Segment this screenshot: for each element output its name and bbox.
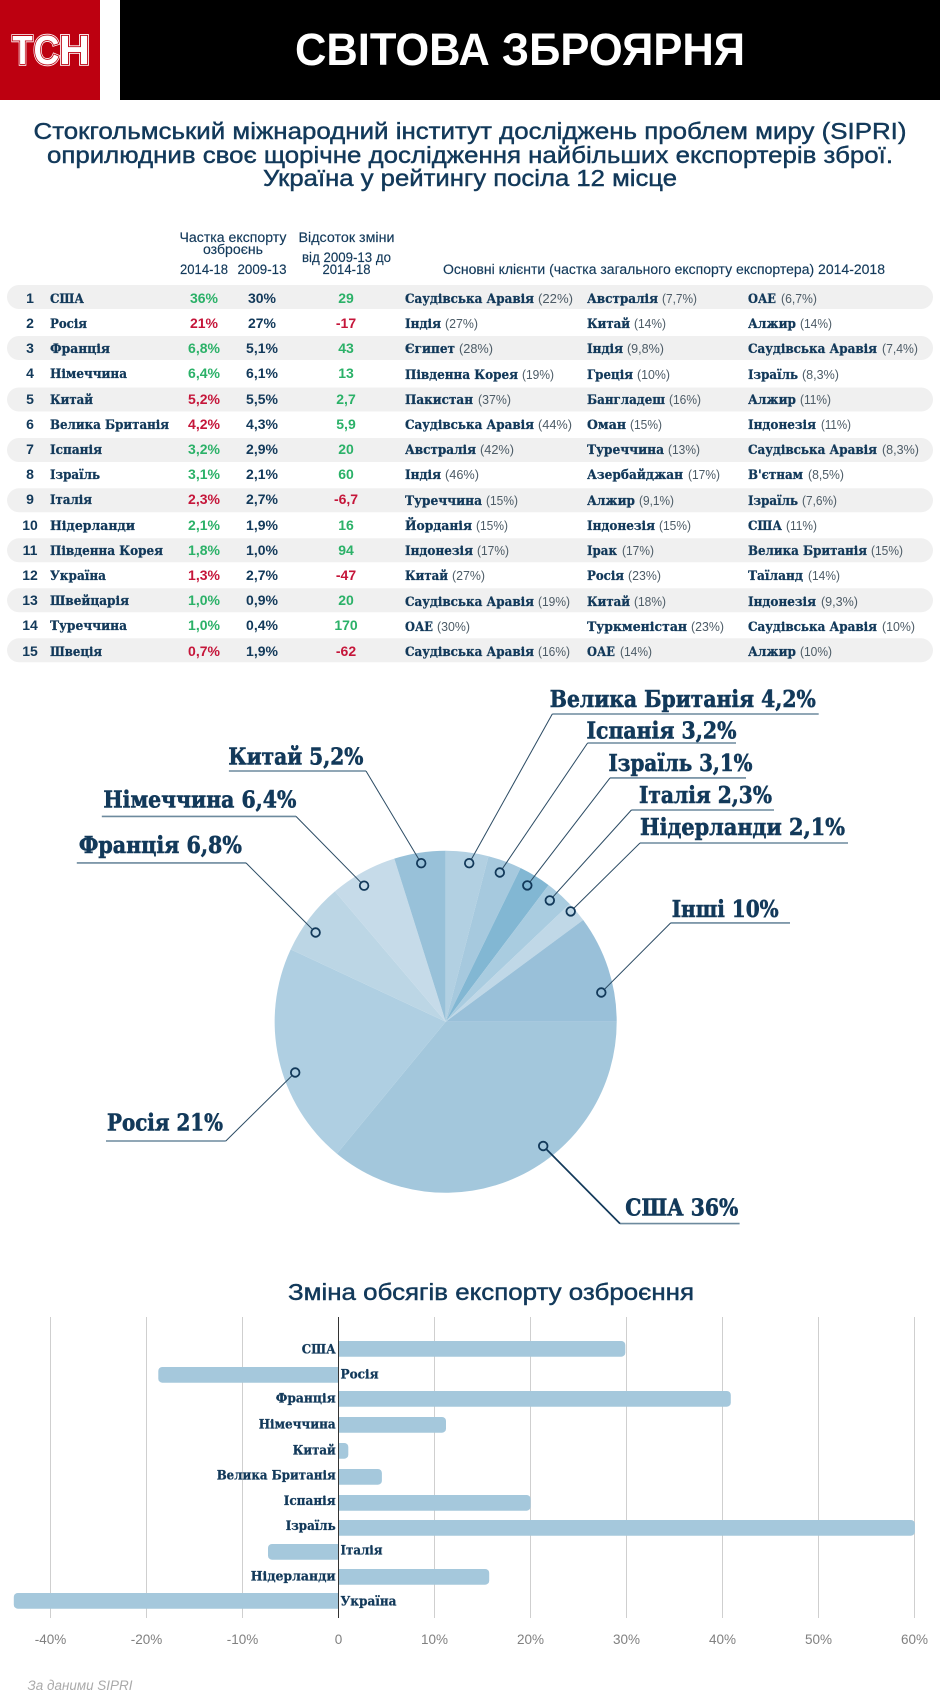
table row: Італія: 2,7% (246, 491, 279, 507)
pie chart (275, 851, 617, 1193)
table row: Швейцарія: Швейцарія (50, 594, 129, 609)
table row: Франція: 43 (338, 340, 354, 356)
table row: Туреччина: (30%) (437, 619, 470, 634)
table row: Ізраїль: 60 (338, 466, 354, 482)
table row: Китай: Бангладеш (587, 393, 665, 408)
table row: Нідерланди: (15%) (476, 518, 508, 533)
bar chart: Німеччина (259, 1418, 336, 1433)
table row: Україна (22, 567, 840, 584)
logo: TSN: С (34, 27, 60, 73)
table row: Німеччина: 6,4% (188, 365, 221, 381)
pie label: Франція: Франція 6,8% (79, 832, 242, 859)
table row: Південна Корея: Велика Британія (748, 544, 867, 559)
bar chart: Велика Британія (217, 1469, 336, 1484)
table row: Китай (7, 388, 933, 412)
pie label: Росія: Росія 21% (107, 1110, 223, 1137)
table row: Велика Британія: Велика Британія (50, 418, 169, 433)
table row: Франція: (28%) (459, 341, 493, 356)
logo: TSN: Т (12, 27, 33, 73)
table row: Нідерланди: Індонезія (587, 519, 655, 534)
table row: Швеція: (10%) (800, 644, 832, 659)
table row: Велика Британія: Саудівська Аравія (405, 418, 534, 433)
table row: Нідерланди: 1,9% (246, 517, 279, 533)
table row: США: 29 (338, 290, 354, 306)
pie label: Китай: Китай 5,2% (228, 744, 364, 771)
table row: Південна Корея: (15%) (871, 543, 903, 558)
intro text: Стокгольмський міжнародний інститут досліджень проблем миру (SIPRI) (34, 118, 906, 144)
bar chart heading: Зміна обсягів експорту озброєння (288, 1279, 694, 1305)
table row: Франція: Єгипет (405, 342, 455, 357)
table row: Ізраїль (26, 466, 844, 483)
pie label: США: США 36% (625, 1194, 738, 1222)
table row: Ізраїль: В'єтнам (748, 468, 803, 483)
table row: США: США (50, 292, 84, 307)
bar chart: Італія (340, 1544, 383, 1559)
table row: Швейцарія: (18%) (634, 594, 666, 609)
table row: Південна Корея: Індонезія (405, 544, 473, 559)
table row: Південна Корея: Південна Корея (50, 544, 163, 559)
table row: Іспанія (7, 438, 933, 462)
table row: Швеція: (14%) (620, 644, 652, 659)
bar chart: Іспанія (284, 1494, 336, 1509)
table header (180, 230, 885, 277)
table row: Китай: 5,5% (246, 391, 279, 407)
table row: Велика Британія: 6 (26, 416, 34, 432)
table row: Італія: (9,1%) (639, 493, 674, 508)
pie label: Китай (228, 744, 426, 868)
bar chart: -20% (131, 1632, 162, 1647)
source note: За даними SIPRI (28, 1678, 133, 1693)
table row: Південна Корея: (17%) (622, 543, 654, 558)
logo: TSN: Н (59, 27, 90, 73)
table row: Нідерланди: Нідерланди (50, 519, 135, 534)
pie label: Інші: Інші 10% (672, 896, 779, 923)
table row: Китай: 5 (26, 391, 34, 407)
table row: Франція: 3 (26, 340, 34, 356)
logo: TSN: Т (12, 27, 33, 73)
table row: Франція: Індія (587, 342, 623, 357)
table header: від 2009-13 до (302, 250, 391, 265)
table row: Україна: Китай (405, 569, 448, 584)
table row: Південна Корея (7, 538, 933, 562)
table row: Іспанія: Туреччина (587, 443, 665, 458)
bar chart: 60% (901, 1632, 928, 1647)
table row: Туреччина: 14 (22, 617, 38, 633)
pie label: Інші (597, 896, 790, 997)
table row: Німеччина (26, 365, 839, 383)
table row: Швейцарія: (9,3%) (821, 594, 858, 609)
table row: Росія: 21% (190, 315, 219, 331)
table row: Іспанія: 20 (338, 441, 354, 457)
pie label: Нідерланди: Нідерланди 2,1% (640, 814, 845, 841)
table row: США: 36% (190, 290, 219, 306)
table row: Швейцарія: (19%) (538, 594, 570, 609)
table row: Швейцарія: 13 (22, 592, 38, 608)
table row: Швеція: Швеція (50, 645, 102, 660)
bar chart: 10% (421, 1632, 448, 1647)
table row: Франція: Франція (50, 342, 110, 357)
table row: Китай: (37%) (478, 392, 511, 407)
table row: США: 1 (26, 290, 34, 306)
table row: Італія: 9 (26, 491, 34, 507)
table row: Італія: -6,7 (334, 491, 358, 507)
table row: Росія: Росія (50, 317, 87, 332)
table row: Китай: (11%) (800, 392, 831, 407)
pie label: Італія: Італія 2,3% (639, 782, 772, 809)
table row: Росія: Алжир (748, 317, 796, 332)
table row: Німеччина: (8,3%) (802, 367, 839, 382)
table row: Китай: 2,7 (336, 391, 356, 407)
table row: Росія: 2 (26, 315, 34, 331)
table row: Італія: Алжир (587, 494, 635, 509)
table row: Ізраїль: (17%) (688, 467, 720, 482)
table row: Нідерланди: Йорданія (405, 517, 472, 534)
bar chart: Китай (293, 1444, 336, 1459)
table header: 2009-13 (238, 262, 286, 277)
table row: Німеччина: 13 (338, 365, 354, 381)
pie label: Велика Британія: Велика Британія 4,2% (550, 686, 816, 713)
table row: Іспанія: (42%) (480, 442, 514, 457)
table row: Велика Британія: 4,2% (188, 416, 221, 432)
table row: Швеція: 15 (22, 643, 38, 659)
bar chart: 30% (613, 1632, 640, 1647)
table row: Німеччина: 6,1% (246, 365, 279, 381)
pie label: Іспанія: Іспанія 3,2% (586, 718, 737, 744)
table row: Швейцарія: 20 (338, 592, 354, 608)
table row: Іспанія: 2,9% (246, 441, 279, 457)
table row: Китай: Пакистан (405, 393, 473, 408)
table row: Росія: (14%) (634, 316, 666, 331)
table row: Туреччина: Туреччина (50, 619, 128, 634)
intro text: Україна у рейтингу посіла 12 місце (263, 165, 677, 191)
bar chart (14, 1317, 928, 1647)
table row: Китай: Китай (50, 393, 93, 408)
table row: Росія: (27%) (445, 316, 478, 331)
pie label: Нідерланди (566, 814, 848, 916)
table row: Франція: (7,4%) (882, 341, 918, 356)
table row: Південна Корея: 1,0% (246, 542, 279, 558)
table row: Ізраїль: (8,5%) (808, 467, 844, 482)
table row: Франція: 5,1% (246, 340, 279, 356)
table row: Велика Британія: (15%) (630, 417, 662, 432)
table row: Італія: Італія (50, 493, 92, 508)
bar chart: 20% (517, 1632, 544, 1647)
bar chart: 40% (709, 1632, 736, 1647)
table row: Швейцарія: Індонезія (748, 595, 816, 610)
pie label: Німеччина (102, 786, 368, 890)
bar chart: 50% (805, 1632, 832, 1647)
pie label: Італія (546, 782, 774, 905)
logo: TSN: Т (12, 27, 33, 73)
table row: Велика Британія: 5,9 (336, 416, 356, 432)
logo: TSN: Н (59, 27, 90, 73)
table row: Німеччина: Ізраїль (748, 368, 798, 383)
table row: Туреччина: 170 (334, 617, 358, 633)
table row: Велика Британія: (11%) (821, 417, 851, 432)
table row: США (7, 285, 933, 309)
title banner (120, 0, 940, 100)
table row: Україна: (14%) (808, 568, 840, 583)
table row: Росія: (14%) (800, 316, 832, 331)
table row: Ізраїль: 8 (26, 466, 34, 482)
table row: Туреччина: ОАЕ (405, 620, 433, 635)
table row: Нідерланди: 10 (22, 517, 38, 533)
pie label: Німеччина: Німеччина 6,4% (103, 786, 297, 814)
table row: Україна: 12 (22, 567, 38, 583)
table row: Туреччина: Саудівська Аравія (748, 620, 877, 635)
table row: Китай: 5,2% (188, 391, 221, 407)
table row: Ізраїль: 3,1% (188, 466, 221, 482)
table row: Іспанія: 7 (26, 441, 34, 457)
table row: Німеччина: (19%) (522, 367, 554, 382)
table row: Франція (7, 336, 933, 360)
table row: Швеція: -62 (336, 643, 356, 659)
logo: TSN: С (34, 27, 60, 73)
table row: Велика Британія: Оман (587, 418, 626, 433)
table row: Велика Британія: 4,3% (246, 416, 279, 432)
table row: Швеція: 1,9% (246, 643, 279, 659)
table row: Велика Британія (26, 416, 851, 433)
table row: Німеччина: (10%) (637, 367, 670, 382)
table row: Швеція: Саудівська Аравія (405, 645, 534, 660)
table header: Основні клієнти (частка загального експорту експортера) 2014-2018 (443, 262, 885, 277)
table row: Італія: Туреччина (405, 494, 483, 509)
table row: Нідерланди (22, 517, 817, 534)
table row: Південна Корея: 11 (23, 542, 38, 558)
bar chart: -40% (35, 1632, 66, 1647)
table row: Туреччина (22, 617, 915, 635)
table row: США: ОАЕ (748, 292, 776, 307)
pie label: Іспанія (496, 718, 737, 877)
pie label: Франція (77, 832, 320, 937)
bar chart: -10% (227, 1632, 258, 1647)
bar chart: Нідерланди (251, 1570, 336, 1585)
table row: Швейцарія: 1,0% (188, 592, 221, 608)
pie label: Росія (106, 1068, 300, 1141)
table row: Франція: (9,8%) (627, 341, 664, 356)
table row: Велика Британія: (44%) (538, 417, 572, 432)
table row: Нідерланди: 16 (338, 517, 354, 533)
table row: Південна Корея: (17%) (477, 543, 509, 558)
logo: TSN: С (34, 27, 60, 73)
table row: США: (6,7%) (781, 291, 817, 306)
logo: TSN: Н (59, 27, 90, 73)
table row: Південна Корея: 94 (338, 542, 354, 558)
table row: Китай: (16%) (669, 392, 701, 407)
bar chart: Росія (340, 1368, 379, 1383)
table row: Швеція: ОАЕ (587, 645, 615, 660)
table row: Туреччина: 1,0% (188, 617, 221, 633)
table row: Італія: Ізраїль (748, 494, 798, 509)
table row: США: Австралія (587, 292, 658, 307)
intro text: оприлюднив своє щорічне дослідження найбільших експортерів зброї. (47, 142, 893, 168)
title banner: СВІТОВА ЗБРОЯРНЯ (295, 24, 745, 75)
table row: Туреччина: Туркменістан (587, 620, 687, 635)
table row: Італія: (15%) (486, 493, 518, 508)
table row: Південна Корея: Ірак (587, 544, 618, 559)
table row: Росія: Китай (587, 317, 630, 332)
table row: Україна: 2,7% (246, 567, 279, 583)
table row: Швеція (7, 638, 933, 662)
table row: Швеція: 0,7% (188, 643, 221, 659)
table row: Франція: 6,8% (188, 340, 221, 356)
table row: Швеція: Алжир (748, 645, 796, 660)
table row: Ізраїль: Індія (405, 468, 441, 483)
table row: Росія (26, 315, 832, 332)
table row: Швейцарія (7, 588, 933, 612)
pie label: Велика Британія (465, 686, 819, 868)
table row: Україна: (23%) (628, 568, 661, 583)
table row: Німеччина: Німеччина (50, 367, 128, 382)
bar chart: Франція (276, 1392, 336, 1407)
table row: Ізраїль: Ізраїль (50, 468, 100, 483)
table row: США: (22%) (538, 291, 573, 306)
bar chart: 0 (335, 1632, 342, 1647)
table row: Німеччина: 4 (26, 365, 34, 381)
table row: Україна: -47 (336, 567, 356, 583)
table row: США: (7,7%) (662, 291, 697, 306)
table row: Італія: 2,3% (188, 491, 221, 507)
bar chart: Ізраїль (286, 1519, 336, 1534)
table row: Іспанія: Саудівська Аравія (748, 443, 877, 458)
table row: Нідерланди: 2,1% (188, 517, 221, 533)
pie label: США (539, 1142, 740, 1224)
table header: озброєнь (203, 242, 263, 257)
table header: 2014-18 (322, 262, 370, 277)
table header: Відсоток зміни (298, 230, 394, 245)
table row: Італія (7, 488, 933, 512)
table header: 2014-18 (180, 262, 228, 277)
table row: Іспанія: Іспанія (50, 443, 102, 458)
pie label: Ізраїль (523, 750, 753, 890)
table row: Іспанія: (13%) (668, 442, 700, 457)
table row: Китай: Алжир (748, 393, 796, 408)
bar chart: США (302, 1342, 336, 1357)
table row: Італія: (7,6%) (802, 493, 837, 508)
table row: Ізраїль: (46%) (445, 467, 479, 482)
table row: Україна: (27%) (452, 568, 485, 583)
table row: Велика Британія: Індонезія (748, 418, 816, 433)
table row: США: 30% (248, 290, 277, 306)
table row: Туреччина: (10%) (882, 619, 915, 634)
pie label: Ізраїль: Ізраїль 3,1% (608, 750, 753, 777)
table row: Туреччина: 0,4% (246, 617, 279, 633)
table row: Україна: Таїланд (748, 569, 803, 584)
table row: Ізраїль: 2,1% (246, 466, 279, 482)
table row: Швейцарія: Китай (587, 595, 630, 610)
intro text (34, 118, 906, 191)
table row: Швейцарія: 0,9% (246, 592, 279, 608)
table row: Туреччина: (23%) (691, 619, 724, 634)
table row: Нідерланди: США (748, 519, 782, 534)
table row: Іспанія: (8,3%) (882, 442, 919, 457)
table row: Україна: 1,3% (188, 567, 221, 583)
table row: Нідерланди: (11%) (786, 518, 817, 533)
table row: Південна Корея: 1,8% (188, 542, 221, 558)
table row: Ізраїль: Азербайджан (587, 468, 683, 483)
table row: Україна: Росія (587, 569, 624, 584)
bar chart: Україна (340, 1595, 397, 1610)
table row: Росія: 27% (248, 315, 277, 331)
table row: Франція: Саудівська Аравія (748, 342, 877, 357)
table row: Німеччина: Греція (587, 368, 633, 383)
table header: Частка експорту (180, 230, 287, 245)
table row: Швейцарія: Саудівська Аравія (405, 595, 534, 610)
table row: Іспанія: 3,2% (188, 441, 221, 457)
logo: TSN (0, 0, 100, 100)
table row: Іспанія: Австралія (405, 443, 476, 458)
table row: Нідерланди: (15%) (659, 518, 691, 533)
table row: Росія: -17 (336, 315, 356, 331)
table row: Німеччина: Південна Корея (405, 368, 518, 383)
table row: США: Саудівська Аравія (405, 292, 534, 307)
table row: Росія: Індія (405, 317, 441, 332)
table row: Україна: Україна (50, 569, 107, 584)
table row: Швеція: (16%) (538, 644, 570, 659)
